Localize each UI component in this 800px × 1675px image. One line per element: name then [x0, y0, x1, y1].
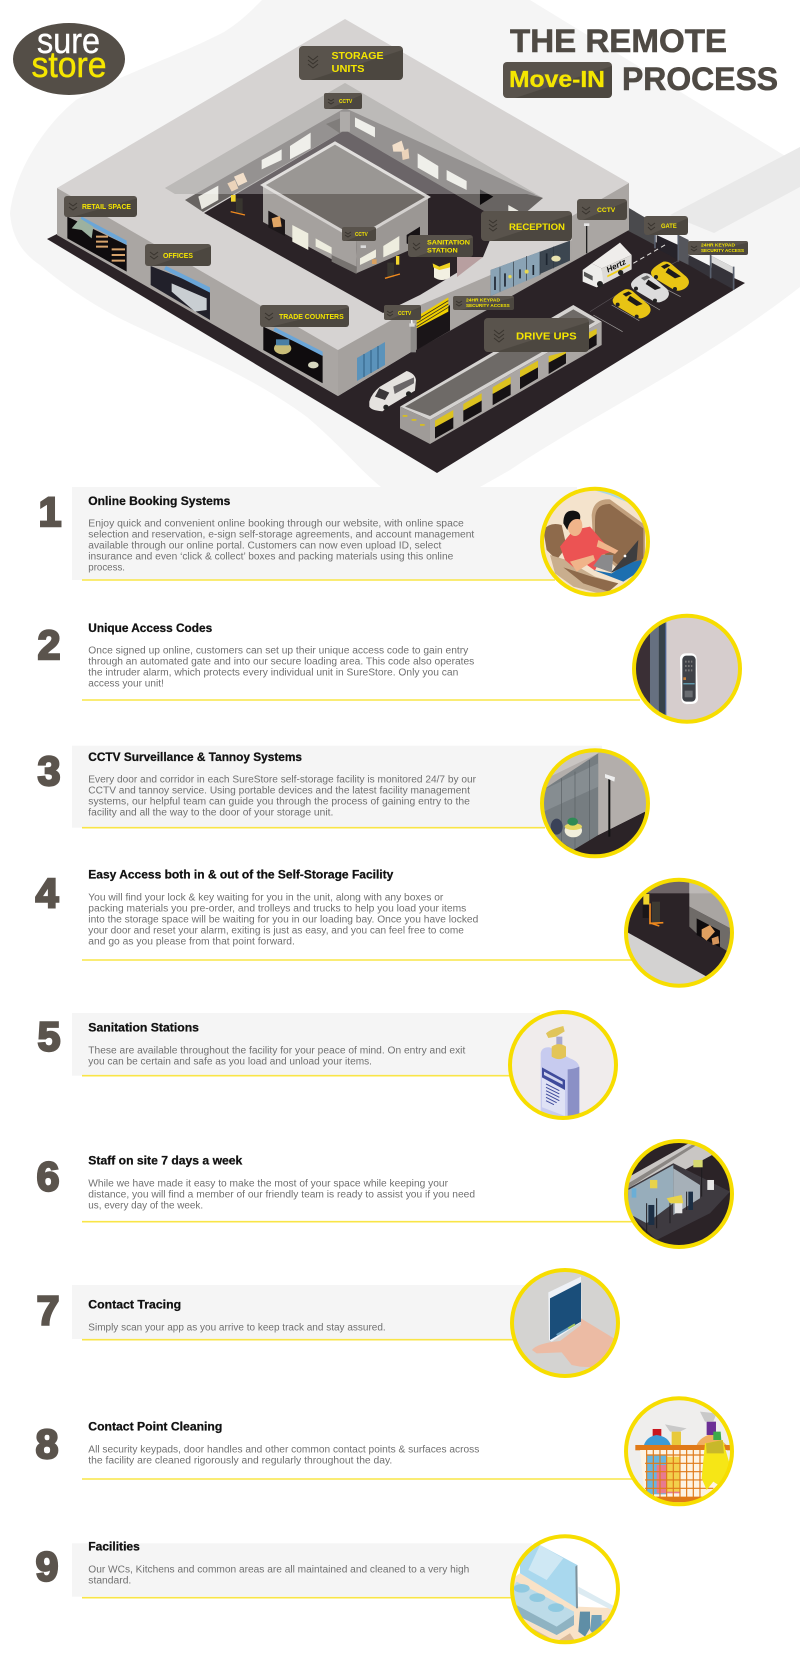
asphalt ground — [47, 229, 745, 473]
step 2 text: through an automated gate and into our secure loading area. This code also operates — [88, 657, 474, 668]
step 8 rule — [82, 1478, 632, 1480]
title: THE REMOTE — [510, 23, 727, 59]
step 2 image: keypad on wall — [630, 613, 743, 727]
step 3 image: cctv camera on pole — [540, 747, 650, 860]
step 7 panel — [72, 1285, 532, 1339]
step 9 number: 9 — [36, 1544, 58, 1590]
step 2 heading: Unique Access Codes — [88, 621, 213, 635]
step 2 text: Once signed up online, customers can set up their unique access code to gain entry — [88, 646, 468, 657]
label: gate: GATE — [661, 224, 677, 230]
step 4 text: packing materials you pre-order, and trolleys and trucks to help you load your items — [88, 904, 466, 915]
step 2 rule — [82, 699, 640, 701]
step 5 text: you can be certain and safe as you load and unload your items. — [88, 1057, 372, 1068]
step 3 text: CCTV and tannoy service. Using portable devices and the latest facility management — [88, 786, 470, 797]
step 7 rule — [82, 1339, 515, 1341]
label: cctv right — [577, 199, 627, 220]
label: sanitation station: STATION — [427, 248, 458, 254]
step 8 number: 8 — [36, 1421, 58, 1467]
label: 24hr keypad right — [688, 241, 748, 255]
step 6 rule — [82, 1221, 632, 1223]
step 1 text: Enjoy quick and convenient online booking through our website, with online space — [88, 519, 464, 530]
label: cctv lower: CCTV — [398, 311, 412, 317]
step 1 text: selection and reservation, e-sign self-storage agreements, and account management — [88, 530, 475, 541]
step 1 text — [88, 519, 475, 574]
step 4 text: and go as you please from that point forward. — [88, 937, 295, 948]
step 4 text: into the storage space will be waiting for you in our loading bay. Once you have locked — [88, 915, 478, 926]
gate wall and fence — [590, 207, 734, 332]
step 2 number: 2 — [38, 622, 60, 668]
step 4 image: trolley and unit — [623, 877, 737, 990]
step 8 image: cleaning basket — [623, 1397, 737, 1507]
step 4 text — [88, 893, 478, 948]
step 9 heading: Facilities — [88, 1540, 140, 1554]
step 3 number: 3 — [38, 748, 60, 794]
step 3: cctv and tannoy — [38, 746, 650, 860]
left wing shop windows — [67, 217, 323, 383]
step 1 number: 1 — [39, 489, 61, 535]
step 7: contact tracing — [37, 1268, 620, 1378]
step 4 rule — [82, 959, 632, 961]
label: gate — [644, 216, 688, 235]
title: Move-IN — [509, 66, 605, 92]
centre building — [263, 143, 428, 278]
label: cctv right: CCTV — [597, 207, 616, 214]
title: PROCESS — [622, 61, 778, 97]
step 1 text: process. — [88, 563, 125, 574]
courtyard floor — [204, 130, 510, 313]
step 6 number: 6 — [37, 1154, 59, 1200]
step 7 image: phone in hand — [510, 1268, 620, 1378]
courtyard back walls — [185, 108, 345, 212]
step 4 number: 4 — [36, 870, 59, 916]
step 6 text: us, every day of the week. — [88, 1201, 203, 1212]
step 9 rule — [82, 1597, 515, 1599]
parked cars — [613, 261, 689, 319]
step 6 text: distance, you will find a member of our friendly team is ready to assist you if you need — [88, 1190, 475, 1201]
label: cctv lower — [384, 305, 421, 320]
step 5 heading: Sanitation Stations — [88, 1021, 199, 1035]
logo: sure store: sure — [37, 20, 100, 61]
step 1 heading: Online Booking Systems — [88, 494, 231, 508]
background blob behind site plan — [10, 0, 800, 487]
step 7 number: 7 — [37, 1288, 59, 1334]
storage doors and boxes — [198, 112, 518, 217]
step 1 rule — [82, 579, 555, 581]
step 8 text: the facility are cleaned rigorously and regularly throughout the day. — [88, 1456, 392, 1467]
label: cctv top — [324, 93, 362, 109]
background diagonal road stripe — [670, 147, 800, 233]
site plan illustration — [47, 19, 745, 473]
step 5 panel — [72, 1013, 540, 1076]
step 3 panel — [72, 746, 602, 828]
drive up units — [400, 305, 602, 444]
title — [503, 23, 778, 98]
step 9 text — [88, 1565, 469, 1587]
step 2 text: the intruder alarm, which protects every individual unit in SureStore. Only you can — [88, 668, 458, 679]
step 2 text — [88, 646, 474, 690]
step 9 image: washroom — [510, 1533, 620, 1647]
step 9: facilities — [36, 1533, 620, 1647]
step 4: easy access — [36, 868, 737, 990]
step 4 text: You will find your lock & key waiting for you in the unit, along with any boxes or — [88, 893, 444, 904]
courtyard ceiling shade — [165, 83, 543, 198]
label: cctv centre: CCTV — [355, 232, 368, 238]
hertz truck: Hertz — [605, 257, 627, 274]
step 3 text: systems, our helpful team can guide you through the process of gaining entry to the — [88, 797, 470, 808]
step 5 number: 5 — [38, 1014, 60, 1060]
step 3 text — [88, 775, 477, 819]
step 3 rule — [82, 827, 545, 829]
step 9 text: standard. — [88, 1576, 131, 1587]
label: cctv top: CCTV — [339, 99, 353, 105]
label: offices: OFFICES — [163, 253, 193, 260]
label: storage units: UNITS — [332, 64, 365, 75]
label: retail space: RETAIL SPACE — [82, 204, 131, 211]
step 7 heading: Contact Tracing — [88, 1298, 181, 1312]
label: cctv centre — [342, 227, 376, 241]
step 2 text: access your unit! — [88, 679, 164, 690]
step 6 text: While we have made it easy to make the most of your space while keeping your — [88, 1179, 449, 1190]
logo: sure store: store — [32, 44, 106, 85]
logo: sure store — [13, 20, 125, 95]
step 9 text: Our WCs, Kitchens and common areas are all maintained and cleaned to a very high — [88, 1565, 469, 1576]
van — [369, 371, 416, 411]
label: reception — [481, 211, 572, 241]
step 8 heading: Contact Point Cleaning — [88, 1420, 222, 1434]
hertz truck — [583, 243, 632, 287]
label: 24hr keypad right: 24HR KEYPAD — [701, 242, 735, 248]
label: offices — [145, 244, 211, 266]
label: trade counters — [260, 305, 349, 327]
reception glazing — [491, 241, 570, 296]
step 6 image: reception team — [623, 1137, 737, 1250]
label: sanitation station: SANITATION — [427, 240, 470, 246]
label: drive ups — [484, 318, 589, 352]
translucent roof overlay — [165, 83, 543, 198]
corner wall — [338, 309, 411, 396]
step 5: sanitation stations — [38, 1010, 620, 1120]
step 5 rule — [82, 1075, 510, 1077]
corner window — [357, 342, 385, 381]
street lamp — [584, 223, 589, 253]
step 1 text: available through our online portal. Customers can now even upload ID, select — [88, 541, 442, 552]
step 3 text: Every door and corridor in each SureStore self-storage facility is monitored 24/7 by our — [88, 775, 477, 786]
step 1 text: insurance and even ‘click & collect’ boxes and packing materials using this online — [88, 552, 454, 563]
label: storage units — [299, 46, 403, 80]
yellow roller door — [409, 297, 450, 352]
step 5 text: These are available throughout the facility for your peace of mind. On entry and exit — [88, 1046, 466, 1057]
step 6 text — [88, 1179, 475, 1212]
label: retail space — [64, 196, 137, 217]
step 3 heading: CCTV Surveillance & Tannoy Systems — [88, 750, 302, 764]
step 1 panel — [72, 487, 577, 580]
step 5 image: sanitiser bottle — [507, 1010, 620, 1120]
step 8: contact point cleaning — [36, 1397, 737, 1507]
step 4 heading: Easy Access both in & out of the Self-Storage Facility — [88, 868, 394, 882]
label: 24hr keypad centre: SECURITY ACCESS — [466, 303, 510, 308]
right wing wall — [572, 183, 629, 262]
step 8 text — [88, 1445, 479, 1467]
step 2: unique access codes — [38, 613, 743, 727]
label: 24hr keypad centre — [453, 296, 514, 310]
step 6 heading: Staff on site 7 days a week — [88, 1154, 243, 1168]
label: storage units: STORAGE — [332, 51, 384, 62]
step 5 text — [88, 1046, 466, 1068]
label: sanitation station — [408, 235, 473, 257]
outer front wall — [57, 188, 338, 396]
step 8 text: All security keypads, door handles and other common contact points & surfaces across — [88, 1445, 479, 1456]
step 4 text: your door and reset your alarm, exiting is just as easy, and you can feel free to come — [88, 926, 464, 937]
step 3 text: facility and all the way to the door of your storage unit. — [88, 808, 333, 819]
label: trade counters: TRADE COUNTERS — [279, 314, 344, 321]
label: 24hr keypad centre: 24HR KEYPAD — [466, 298, 500, 302]
step 6: staff on site — [37, 1137, 737, 1250]
pink entrance mat — [457, 257, 483, 277]
label: 24hr keypad right: SECURITY ACCESS — [701, 248, 744, 253]
label: drive ups: DRIVE UPS — [516, 330, 577, 342]
label: reception: RECEPTION — [509, 222, 565, 233]
step 1 image: person on sofa with laptop — [540, 487, 650, 597]
main building roof — [57, 19, 629, 350]
step 9 panel — [72, 1543, 532, 1597]
move-in badge — [503, 62, 612, 98]
step 7 text: Simply scan your app as you arrive to keep track and stay assured. — [88, 1323, 386, 1334]
step 1: online booking — [39, 487, 650, 597]
sanitation station pod — [433, 263, 450, 280]
